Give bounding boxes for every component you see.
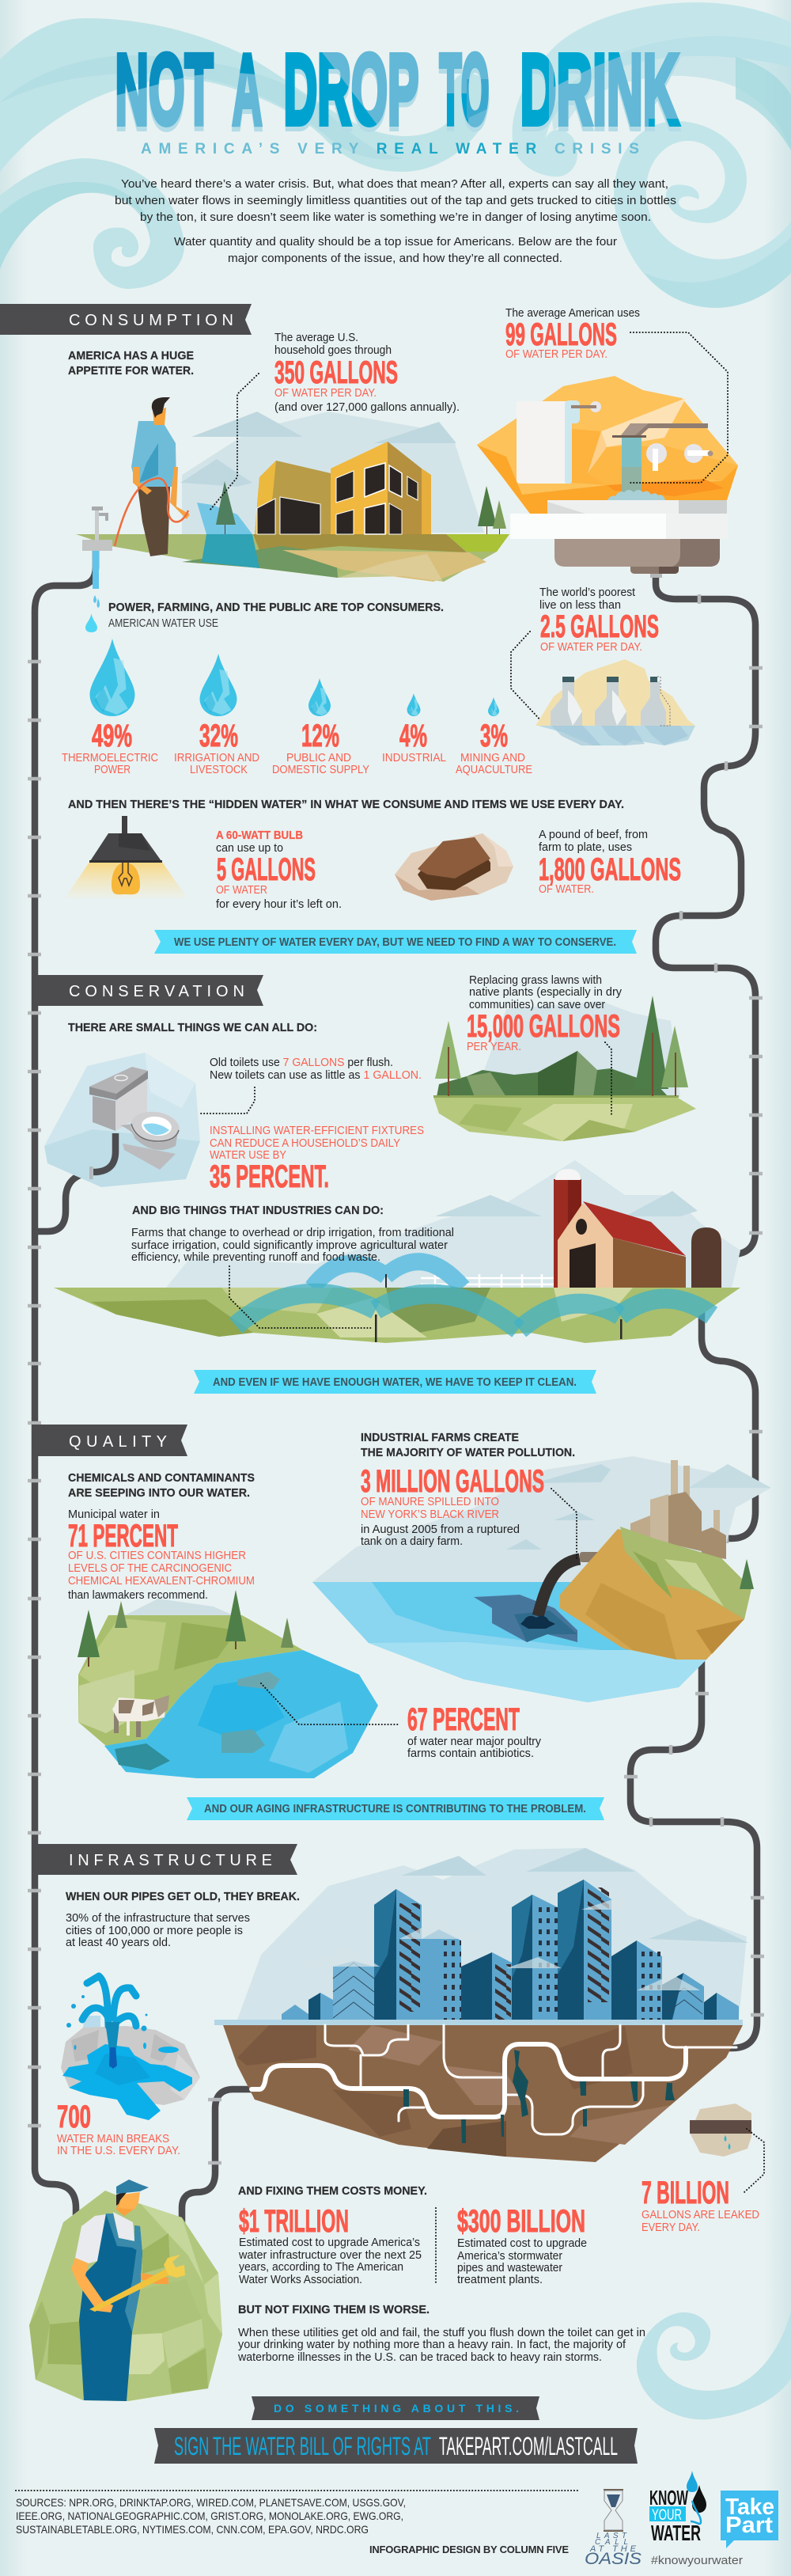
sprinkler arcs on field (236, 1293, 712, 1330)
heading and text: not fixing is worse (237, 2303, 645, 2364)
barn (554, 1169, 686, 1288)
consumption heading: AMERICA HAS A HUGE (68, 349, 194, 362)
farm irrigation text: surface irrigation, could significantly improve agricultural water (131, 1239, 448, 1252)
logo: last call at the oasis: CALL (595, 2538, 628, 2547)
drop 3 percent: AQUACULTURE (456, 763, 532, 776)
heading and text: not fixing is worse: waterborne illnesses in the U.S. can be traced back to heavy rain storms. (237, 2350, 602, 2364)
stat: 2.5 gallons: live on less than (539, 598, 621, 612)
dotted callout: toilet (199, 1087, 255, 1113)
heading and text: not fixing is worse: BUT NOT FIXING THEM IS WORSE. (238, 2303, 430, 2316)
logo: last call at the oasis: OASIS (585, 2550, 642, 2568)
stat: 1 trillion: water infrastructure over the next 25 (238, 2248, 422, 2262)
dotted divider (435, 2208, 437, 2285)
quality heading: CHEMICALS AND CONTAMINANTS (68, 1471, 255, 1485)
callout banner: conserve (154, 930, 637, 954)
stat: 350 gallons: (and over 127,000 gallons annually). (274, 400, 460, 414)
logo: know your water: KNOW (649, 2486, 688, 2510)
river (312, 1582, 706, 1702)
heading and text: not fixing is worse: your drinking water by nothing more than a heavy rain. In fact, the majority of (238, 2338, 626, 2351)
consumption heading (68, 349, 194, 377)
illustration: lake with cow (78, 1590, 378, 1778)
section banner: conservation: CONSERVATION (69, 983, 244, 1000)
infrastructure age text: at least 40 years old. (66, 1936, 171, 1949)
stat: 35 percent: CAN REDUCE A HOUSEHOLD’S DAILY (210, 1136, 400, 1150)
stat: 71 percent: OF U.S. CITIES CONTAINS HIGHER (68, 1549, 246, 1562)
stat: 60-watt bulb: OF WATER (216, 883, 267, 897)
stat: 700 water main breaks: IN THE U.S. EVERY DAY. (57, 2144, 180, 2157)
farm irrigation text: Farms that change to overhead or drip irrigation, from traditional (131, 1226, 454, 1239)
stat: 15000 gallons: 15,000 GALLONS (467, 1009, 620, 1044)
stat: 1 trillion: Water Works Association. (239, 2273, 362, 2286)
stat: 67 percent: farms contain antibiotics. (407, 1747, 534, 1760)
design credit: INFOGRAPHIC DESIGN BY COLUMN FIVE (369, 2544, 569, 2555)
stat: 350 gallons: 350 GALLONS (274, 355, 398, 390)
spill (474, 1595, 577, 1642)
lake (104, 1650, 378, 1778)
bowl (123, 1144, 176, 1170)
section banner: infrastructure: INFRASTRUCTURE (69, 1852, 272, 1869)
drop 49 percent: 49% (92, 719, 132, 753)
dotted callout: bottles (511, 632, 544, 724)
stat: 67 percent (407, 1702, 541, 1760)
stat: 3 million gallons: in August 2005 from a ruptured (361, 1523, 520, 1536)
intro text: Water quantity and quality should be a top issue for Americans. Below are the four (174, 235, 617, 248)
stat: 7 billion: GALLONS ARE LEAKED (642, 2208, 759, 2221)
dotted callout: farm (229, 1266, 373, 1328)
stat: 700 water main breaks: 700 (57, 2100, 91, 2134)
stat: 2.5 gallons: The world’s poorest (539, 586, 636, 599)
stat: 1 trillion: years, according to The American (239, 2260, 403, 2274)
illustration: water main break (61, 1976, 200, 2120)
stat: 1800 gallons (539, 828, 681, 896)
drop 3 percent: 3% (480, 719, 508, 753)
heading and text: not fixing is worse: When these utilities get old and fail, the stuff you flush down the toilet can get in (238, 2326, 645, 2339)
illustration: farm (54, 1160, 740, 1343)
faucet and water (607, 423, 713, 500)
stat: 3 million gallons: NEW YORK’S BLACK RIVER (361, 1508, 499, 1521)
stat: 700 water main breaks: WATER MAIN BREAKS (57, 2132, 169, 2145)
stat: 300 billion: $300 BILLION (457, 2204, 585, 2239)
title: DROP (283, 33, 419, 146)
title: NOT (115, 33, 214, 146)
stat: 60-watt bulb: A 60-WATT BULB (216, 829, 303, 842)
heading: hidden water: AND THEN THERE’S THE “HIDDEN WATER” IN WHAT WE CONSUME AND ITEMS WE USE EVERY DAY. (68, 798, 624, 811)
silo tank (691, 1227, 721, 1288)
logo: last call at the oasis: AT THE (589, 2544, 637, 2554)
ground (76, 503, 509, 582)
logo: know your water (649, 2471, 706, 2545)
shrubs (437, 1051, 668, 1097)
stat: 71 percent: CHEMICAL HEXAVALENT-CHROMIUM (68, 1574, 255, 1588)
intro text: by the ton, it sure doesn’t seem like water is something we’re in danger of losing anytime soon. (140, 211, 651, 224)
toilet comparison text: New toilets can use as little as 1 GALLON. (210, 1068, 422, 1082)
stat: 67 percent: 67 PERCENT (407, 1702, 520, 1737)
stat: 71 percent: 71 PERCENT (68, 1519, 178, 1554)
house (255, 442, 431, 534)
towel (517, 400, 601, 484)
logo: take part: Take (725, 2494, 774, 2520)
logo: take part (721, 2491, 778, 2548)
logo: take part: Part (725, 2513, 773, 2538)
callout banner: aging infrastructure: AND OUR AGING INFRASTRUCTURE IS CONTRIBUTING TO THE PROBLEM. (204, 1803, 586, 1815)
drop 49 percent (62, 639, 158, 776)
call to action banner: DO SOMETHING ABOUT THIS. (274, 2402, 519, 2415)
illustration: leaking pipe close-up (690, 2104, 751, 2157)
stat: 7 billion: EVERY DAY. (642, 2221, 700, 2234)
sources: SUSTAINABLETABLE.ORG, NYTIMES.COM, CNN.COM, EPA.GOV, NRDC.ORG (16, 2523, 369, 2536)
water bill of rights banner: TAKEPART.COM/LASTCALL (439, 2432, 618, 2460)
dotted callout: lawn (605, 1042, 611, 1116)
earth (223, 2025, 743, 2162)
heading: top consumers: AMERICAN WATER USE (108, 617, 218, 630)
factory (630, 1460, 726, 1559)
heading: industrial farms: THE MAJORITY OF WATER POLLUTION. (361, 1446, 575, 1459)
ground plate (214, 2020, 743, 2025)
illustration: native plant landscape (433, 996, 696, 1141)
illustration: bathroom sink (477, 376, 738, 578)
sources: IEEE.ORG, NATIONALGEOGRAPHIC.COM, GRIST.ORG, MONOLAKE.ORG, EWG.ORG, (16, 2510, 403, 2522)
stat: 350 gallons: household goes through (274, 343, 392, 357)
infrastructure age text: cities of 100,000 or more people is (66, 1924, 243, 1937)
intro text: You’ve heard there’s a water crisis. But, what does that mean? After all, experts can say all they want, (121, 177, 668, 191)
illustration: plumber (29, 2180, 222, 2401)
man (131, 397, 190, 556)
illustration: beef on plate (395, 833, 513, 901)
drop 4 percent: INDUSTRIAL (382, 751, 446, 764)
drop chart: american water use (62, 639, 532, 776)
heading: top consumers (108, 601, 444, 630)
fountain (82, 1976, 136, 2026)
title (115, 33, 679, 146)
title: TO (440, 33, 489, 146)
intro text: major components of the issue, and how they’re all connected. (228, 252, 562, 265)
stat: 3 million gallons (361, 1464, 544, 1548)
heading: small things: THERE ARE SMALL THINGS WE CAN ALL DO: (68, 1021, 317, 1034)
stat: 15000 gallons: PER YEAR. (467, 1040, 521, 1053)
stat: 99 gallons (505, 306, 640, 361)
stat: 700 water main breaks (57, 2100, 180, 2157)
cow (112, 1695, 169, 1737)
stat: 60-watt bulb (216, 829, 342, 911)
stat: 35 percent (210, 1124, 424, 1194)
heading: top consumers: POWER, FARMING, AND THE PUBLIC ARE TOP CONSUMERS. (108, 601, 444, 614)
stat: 15000 gallons: Replacing grass lawns with (469, 973, 602, 987)
stat: 99 gallons: 99 GALLONS (505, 317, 617, 352)
trees (216, 481, 506, 534)
plumber figure (71, 2180, 185, 2401)
leaks (403, 2050, 675, 2143)
section banner: consumption (0, 304, 252, 335)
dotted callout: house (210, 374, 259, 510)
toilet comparison text (210, 1056, 422, 1082)
drop 12 percent: DOMESTIC SUPPLY (272, 763, 369, 776)
pipe outflow (538, 1559, 580, 1616)
stat: 35 percent: WATER USE BY (210, 1148, 286, 1162)
drop 12 percent: 12% (301, 719, 339, 753)
drop 49 percent: POWER (94, 763, 131, 776)
thin clouds over skyline (293, 1895, 700, 1990)
section banner: quality: QUALITY (69, 1433, 167, 1451)
dotted callout: leak (744, 2129, 764, 2192)
illustration: toilet (44, 1053, 200, 1187)
stat: 1 trillion: $1 TRILLION (239, 2204, 349, 2239)
drop 32 percent: IRRIGATION AND (174, 751, 259, 764)
stat: 71 percent: LEVELS OF THE CARCINOGENIC (68, 1561, 232, 1575)
drop 3 percent (456, 697, 532, 776)
stat: 3 million gallons: tank on a dairy farm. (361, 1535, 463, 1548)
stat: 1800 gallons: A pound of beef, from (539, 828, 648, 841)
stat: 15000 gallons (467, 973, 622, 1053)
stat: 60-watt bulb: can use up to (216, 841, 283, 855)
stat: 300 billion: America’s stormwater (457, 2249, 562, 2263)
toilet comparison text: Old toilets use 7 GALLONS per flush. (210, 1056, 393, 1069)
drop 49 percent: THERMOELECTRIC (62, 751, 158, 764)
consumption heading: APPETITE FOR WATER. (68, 364, 194, 377)
stat: 71 percent: than lawmakers recommend. (68, 1588, 208, 1602)
hashtag: #knowyourwater (651, 2554, 743, 2567)
drop 12 percent (272, 678, 369, 776)
drop 3 percent: MINING AND (460, 751, 525, 764)
heading: costs money: AND FIXING THEM COSTS MONEY. (238, 2184, 427, 2198)
farm irrigation text: efficiency, while preventing runoff and food waste. (131, 1250, 380, 1264)
callout banner: keep it clean (194, 1370, 596, 1394)
stat: 35 percent: INSTALLING WATER-EFFICIENT FIXTURES (210, 1124, 424, 1137)
logo: know your water: YOUR (652, 2507, 682, 2524)
sources (16, 2491, 579, 2536)
farm irrigation text (131, 1226, 454, 1264)
stat: 7 billion: 7 BILLION (642, 2176, 729, 2210)
infrastructure age text: 30% of the infrastructure that serves (66, 1911, 250, 1925)
stat: 60-watt bulb: 5 GALLONS (217, 852, 316, 887)
section banner: conservation (32, 975, 263, 1006)
tank (93, 1096, 115, 1131)
stat: 15000 gallons: communities) can save over (469, 998, 605, 1011)
section banner: quality (32, 1425, 187, 1456)
callout banner: aging infrastructure (187, 1797, 604, 1820)
stat: 2.5 gallons: OF WATER PER DAY. (540, 640, 642, 654)
dotted callout: lake (261, 1683, 399, 1724)
stat: 300 billion: pipes and wastewater (457, 2261, 562, 2274)
skyline (282, 1880, 739, 2020)
stat: 1800 gallons: OF WATER. (539, 882, 594, 896)
stat: 3 million gallons: OF MANURE SPILLED INTO (361, 1495, 499, 1508)
logo: last call at the oasis (585, 2490, 642, 2568)
trees (78, 1590, 293, 1667)
fence (421, 1274, 554, 1288)
drop 4 percent: 4% (399, 719, 427, 753)
callout banner: keep it clean: AND EVEN IF WE HAVE ENOUGH WATER, WE HAVE TO KEEP IT CLEAN. (213, 1376, 577, 1389)
stat: 2.5 gallons: 2.5 GALLONS (540, 609, 659, 644)
stat: 350 gallons (274, 331, 460, 414)
sprinkler arcs above ground (312, 1261, 463, 1288)
drop 32 percent: 32% (199, 719, 238, 753)
illustration: factory spill (312, 1456, 771, 1702)
drop 4 percent (382, 693, 446, 764)
stat: 15000 gallons: native plants (especially in dry (469, 985, 622, 999)
call to action banner (252, 2396, 539, 2420)
quality heading: ARE SEEPING INTO OUR WATER. (68, 1486, 250, 1500)
stat: 350 gallons: OF WATER PER DAY. (274, 386, 377, 400)
trees (435, 1021, 461, 1079)
heading: big things: AND BIG THINGS THAT INDUSTRIES CAN DO: (132, 1204, 384, 1217)
stat: 1800 gallons: farm to plate, uses (539, 840, 632, 854)
hose (115, 478, 188, 546)
logo: know your water: WATER (651, 2521, 701, 2545)
stat: 300 billion (457, 2204, 587, 2286)
stat: 1 trillion: Estimated cost to upgrade America’s (239, 2236, 420, 2249)
illustration: hanging lamp (65, 816, 187, 898)
stat: 60-watt bulb: for every hour it’s left on. (216, 897, 342, 911)
callout banner: conserve: WE USE PLENTY OF WATER EVERY DAY, BUT WE NEED TO FIND A WAY TO CONSERVE. (174, 936, 616, 949)
stat: 99 gallons: The average American uses (505, 306, 640, 320)
illustration: house scene with man watering (76, 397, 509, 608)
stat: 71 percent: Municipal water in (68, 1508, 160, 1521)
sources: SOURCES: NPR.ORG, DRINKTAP.ORG, WIRED.COM, PLANETSAVE.COM, USGS.GOV, (16, 2496, 406, 2509)
ground (433, 1097, 696, 1141)
section banner: consumption: CONSUMPTION (69, 312, 233, 329)
heading: industrial farms (361, 1431, 575, 1459)
logo: last call at the oasis: LAST (596, 2532, 627, 2540)
dotted callout: sink (630, 332, 728, 483)
stat: 1 trillion (238, 2204, 422, 2286)
water bill of rights banner: SIGN THE WATER BILL OF RIGHTS AT (174, 2432, 431, 2460)
quality heading (68, 1471, 255, 1500)
sink basin (510, 500, 728, 578)
drop 12 percent: PUBLIC AND (286, 751, 351, 764)
section banner: infrastructure (32, 1844, 297, 1875)
stat: 71 percent (68, 1508, 255, 1602)
stat: 7 billion (642, 2176, 759, 2234)
illustration: city over pipes (214, 1848, 748, 2162)
stat: 300 billion: Estimated cost to upgrade (457, 2236, 587, 2250)
cliff (560, 1529, 751, 1660)
illustration: water bottles (536, 659, 695, 745)
stat: 99 gallons: OF WATER PER DAY. (505, 347, 607, 361)
stat: 2.5 gallons (539, 586, 659, 654)
field (54, 1288, 740, 1343)
stat: 67 percent: of water near major poultry (407, 1735, 541, 1748)
drop 32 percent (174, 654, 259, 776)
intro text: but when water flows in seemingly limitless quantities out of the tap and gets trucked to cities in bottles (115, 194, 676, 207)
stat: 35 percent: 35 PERCENT. (210, 1159, 329, 1194)
icon: small drop (85, 613, 97, 632)
stat: 3 million gallons: 3 MILLION GALLONS (361, 1464, 544, 1499)
infrastructure heading: WHEN OUR PIPES GET OLD, THEY BREAK. (66, 1890, 300, 1903)
subtitle: AMERICA’S VERY REAL WATER CRISIS (141, 141, 639, 157)
heading: industrial farms: INDUSTRIAL FARMS CREATE (361, 1431, 519, 1444)
dotted callout: spill (551, 1489, 577, 1558)
title: A (233, 33, 263, 146)
faucet (82, 506, 112, 608)
underground pipes (252, 2025, 736, 2134)
infrastructure age text (66, 1911, 250, 1949)
stat: 1800 gallons: 1,800 GALLONS (539, 852, 681, 887)
pipes running through the page (28, 546, 764, 2228)
stat: 350 gallons: The average U.S. (274, 331, 358, 344)
drop 32 percent: LIVESTOCK (190, 763, 248, 776)
stat: 300 billion: treatment plants. (457, 2273, 543, 2286)
intro text (115, 177, 676, 265)
